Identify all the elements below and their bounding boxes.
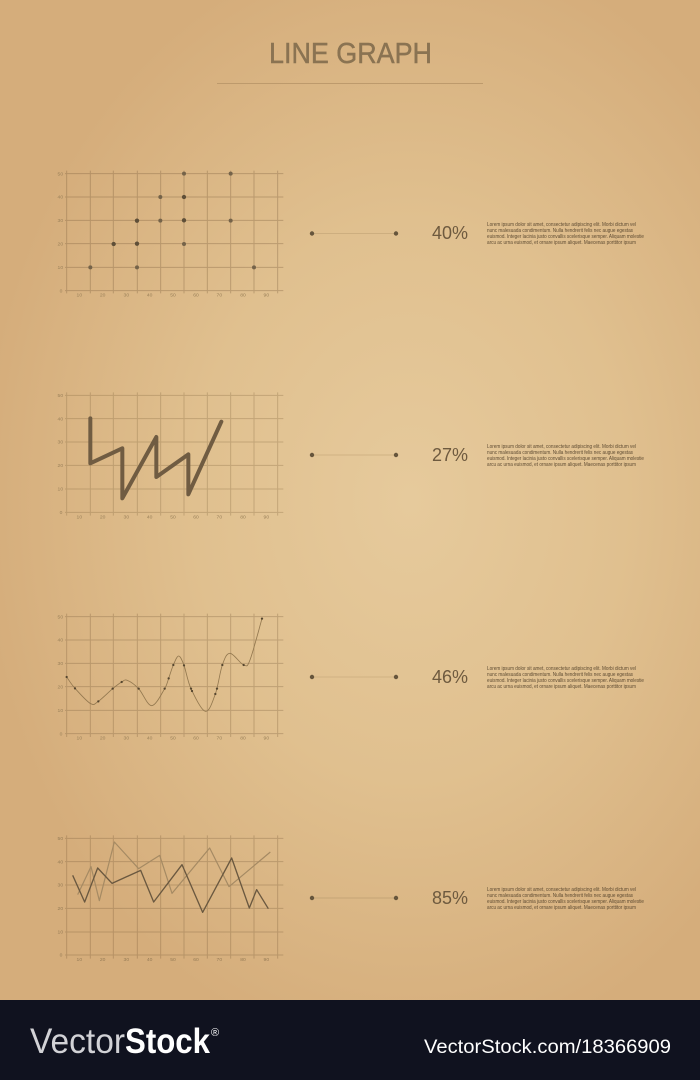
chart: two overlapping lines <box>58 835 283 963</box>
text block: Lorem ipsum dolor sit amet, consectetur adipiscing elit. Morbi dictum vel <box>487 887 636 893</box>
chart: two overlapping lines: 0 <box>60 953 63 959</box>
chart: scatter plot: 10 <box>58 265 63 271</box>
logo: VectorStock: ® <box>211 1027 219 1039</box>
text block: arcu ac urna euismod, et ornare ipsum aliquet. Maecenas porttitor ipsum <box>487 462 636 468</box>
text block: arcu ac urna euismod, et ornare ipsum aliquet. Maecenas porttitor ipsum <box>487 240 636 246</box>
logo: VectorStock: Stock <box>125 1022 210 1061</box>
text block: euismod. Integer lacinia justo convallis scelerisque semper. Aliquam molestie <box>487 899 644 905</box>
chart: thick zigzag line: 80 <box>240 514 246 520</box>
chart: smooth curve with points: 20 <box>100 736 106 742</box>
chart: scatter plot: 50 <box>58 171 63 177</box>
text block: Lorem ipsum dolor sit amet, consectetur adipiscing elit. Morbi dictum vel <box>487 222 636 228</box>
chart: two overlapping lines: 20 <box>58 906 63 912</box>
chart: thick zigzag line: 50 <box>58 393 63 399</box>
text block: arcu ac urna euismod, et ornare ipsum aliquet. Maecenas porttitor ipsum <box>487 905 636 911</box>
text block: Lorem ipsum dolor sit amet, consectetur adipiscing elit. Morbi dictum vel <box>487 666 636 672</box>
chart: smooth curve with points: 50 <box>170 736 176 742</box>
chart: thick zigzag line: 60 <box>193 514 199 520</box>
text block: euismod. Integer lacinia justo convallis scelerisque semper. Aliquam molestie <box>487 678 644 684</box>
chart: scatter plot: 0 <box>60 288 63 294</box>
chart: scatter plot: 10 <box>77 293 82 299</box>
text block: nunc malesuada condimentum. Nulla hendrerit felis nec augue egestas <box>487 450 633 456</box>
chart: scatter plot <box>58 171 283 299</box>
chart: thick zigzag line: 40 <box>147 514 153 520</box>
text block: arcu ac urna euismod, et ornare ipsum aliquet. Maecenas porttitor ipsum <box>487 684 636 690</box>
chart: thick zigzag line: 40 <box>58 416 63 422</box>
chart: smooth curve with points: 90 <box>264 736 269 742</box>
text block <box>487 222 644 246</box>
chart: scatter plot: 60 <box>193 293 199 299</box>
chart: two overlapping lines: 40 <box>58 859 63 865</box>
chart: smooth curve with points: 60 <box>193 736 199 742</box>
chart: two overlapping lines: 80 <box>240 957 246 963</box>
chart: two overlapping lines: 70 <box>217 957 222 963</box>
chart: two overlapping lines: 30 <box>124 957 129 963</box>
chart: scatter plot: 90 <box>264 293 269 299</box>
footer url: VectorStock.com/18366909 <box>424 1037 671 1058</box>
chart: smooth curve with points: 10 <box>58 708 63 714</box>
text block: Lorem ipsum dolor sit amet, consectetur adipiscing elit. Morbi dictum vel <box>487 444 636 450</box>
panel: double line row <box>58 835 644 963</box>
chart: smooth curve with points: 40 <box>147 736 153 742</box>
chart: thick zigzag line: 70 <box>217 514 222 520</box>
chart: scatter plot: 80 <box>240 293 246 299</box>
text block <box>487 666 644 690</box>
footer band <box>0 1000 700 1080</box>
chart: thick zigzag line: 30 <box>58 440 63 446</box>
chart: smooth curve with points: 80 <box>240 736 246 742</box>
connector with dots <box>310 675 398 679</box>
chart: two overlapping lines: 50 <box>58 836 63 842</box>
chart: smooth curve with points: 50 <box>58 614 63 620</box>
chart: smooth curve with points: 70 <box>217 736 222 742</box>
panel: smooth curve row <box>58 614 644 742</box>
text block <box>487 887 644 911</box>
percentage: 27% <box>432 445 468 465</box>
percentage: 85% <box>432 888 468 908</box>
chart: two overlapping lines: 90 <box>264 957 269 963</box>
chart: two overlapping lines: 60 <box>193 957 199 963</box>
chart: thick zigzag line: 10 <box>77 514 82 520</box>
chart: smooth curve with points: 30 <box>58 661 63 667</box>
chart: scatter plot: 30 <box>124 293 129 299</box>
connector with dots <box>310 231 398 236</box>
chart: thick zigzag line: 0 <box>60 510 63 516</box>
text block: nunc malesuada condimentum. Nulla hendrerit felis nec augue egestas <box>487 228 633 234</box>
chart: scatter plot: 20 <box>100 293 106 299</box>
chart: thick zigzag line: 50 <box>170 514 176 520</box>
percentage: 40% <box>432 223 468 243</box>
chart: scatter plot: 40 <box>58 195 63 201</box>
title: LINE GRAPH <box>269 38 432 70</box>
chart: smooth curve with points: 40 <box>58 638 63 644</box>
text block: nunc malesuada condimentum. Nulla hendrerit felis nec augue egestas <box>487 893 633 899</box>
chart: smooth curve with points: 0 <box>60 731 63 737</box>
chart: thick zigzag line: 20 <box>100 514 106 520</box>
chart: smooth curve with points: 10 <box>77 736 82 742</box>
chart: two overlapping lines: 10 <box>77 957 82 963</box>
text block: nunc malesuada condimentum. Nulla hendrerit felis nec augue egestas <box>487 672 633 678</box>
chart: scatter plot: 30 <box>58 218 63 224</box>
chart: thick zigzag line: 20 <box>58 463 63 469</box>
chart: scatter plot: 20 <box>58 241 63 247</box>
text block: euismod. Integer lacinia justo convallis scelerisque semper. Aliquam molestie <box>487 456 644 462</box>
logo: VectorStock: Vector <box>30 1022 125 1061</box>
chart: thick zigzag line: 30 <box>124 514 129 520</box>
chart: two overlapping lines: 30 <box>58 883 63 889</box>
text block: euismod. Integer lacinia justo convallis scelerisque semper. Aliquam molestie <box>487 234 644 240</box>
chart: two overlapping lines: 10 <box>58 930 63 936</box>
chart: scatter plot: 50 <box>170 293 176 299</box>
chart: thick zigzag line: 10 <box>58 487 63 493</box>
chart: two overlapping lines: 20 <box>100 957 106 963</box>
chart: smooth curve with points: 20 <box>58 684 63 690</box>
panel: scatter plot row <box>58 171 644 299</box>
chart: thick zigzag line <box>58 392 283 520</box>
chart: smooth curve with points: 30 <box>124 736 129 742</box>
logo: VectorStock <box>30 1022 219 1061</box>
chart: two overlapping lines: 40 <box>147 957 153 963</box>
percentage: 46% <box>432 667 468 687</box>
chart: thick zigzag line: 90 <box>264 514 269 520</box>
chart: smooth curve with points <box>58 614 283 742</box>
chart: scatter plot: 70 <box>217 293 222 299</box>
chart: scatter plot: 40 <box>147 293 153 299</box>
chart: two overlapping lines: 50 <box>170 957 176 963</box>
connector with dots <box>310 453 398 457</box>
connector with dots <box>310 896 398 900</box>
text block <box>487 444 644 468</box>
panel: zigzag line row <box>58 392 644 520</box>
